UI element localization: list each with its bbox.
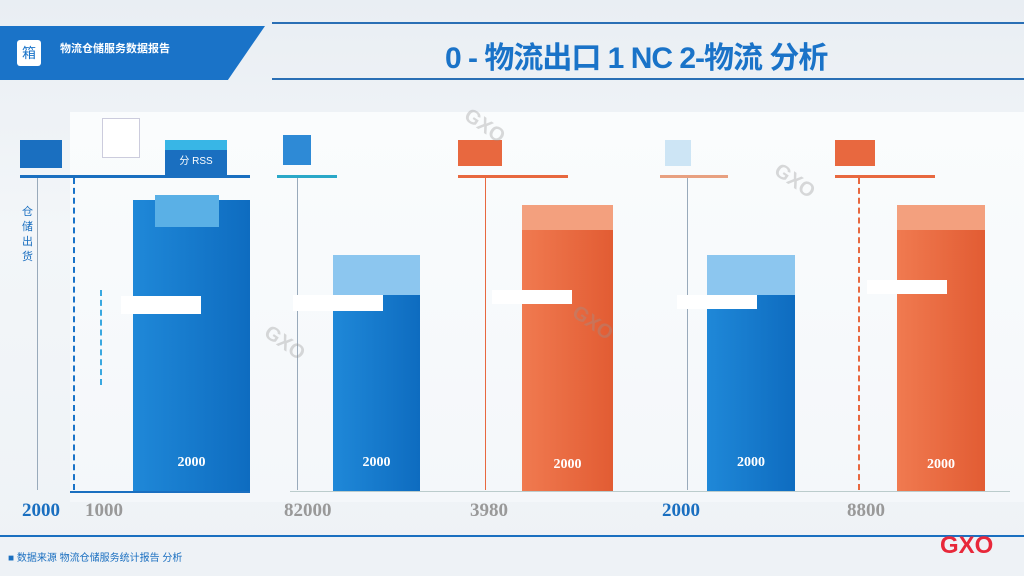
column 5 [835,140,935,490]
bar 1 [133,200,250,492]
text: 1000 [85,500,123,521]
column 3 [458,140,568,490]
bar 2 [333,255,420,492]
column 2 [277,135,337,490]
text: 8800 [847,500,885,521]
footer line [0,535,1024,537]
bar 4 [707,255,795,492]
footer text: ■ 数据来源 物流仓储服务统计报告 分析 [8,553,182,564]
axis labels: 2000 [22,500,60,521]
title: 0 - 物流出口 1 NC 2-物流 分析 [445,42,827,75]
text: 3980 [470,500,508,521]
bar 2: 2000 [362,455,390,470]
icon [20,140,62,168]
logo GXO: GXO [940,532,993,559]
header line top [272,22,1024,24]
text: GXO [260,321,309,365]
baseline [70,491,250,493]
bar 4: 2000 [737,455,765,470]
text: 2000 [662,500,700,521]
side text: 仓储出货 [22,206,33,263]
bar 3: 2000 [554,457,582,472]
chart panel background [70,112,1024,502]
bar 3 [522,205,613,492]
banner icon: 箱 [22,45,36,61]
banner text: 物流仓储服务数据报告 [60,43,170,55]
bar 5 [897,205,985,492]
column 1: 分 RSS [179,156,213,167]
text: 82000 [284,500,332,521]
column 4 [660,140,728,490]
banner icon [17,40,41,66]
banner: top-left [0,26,265,80]
text: GXO [568,301,617,345]
watermarks: GXO [460,104,509,148]
text: GXO [770,159,819,203]
column 1 [20,118,250,490]
bar 5: 2000 [927,457,955,472]
bar 1: 2000 [178,455,206,470]
